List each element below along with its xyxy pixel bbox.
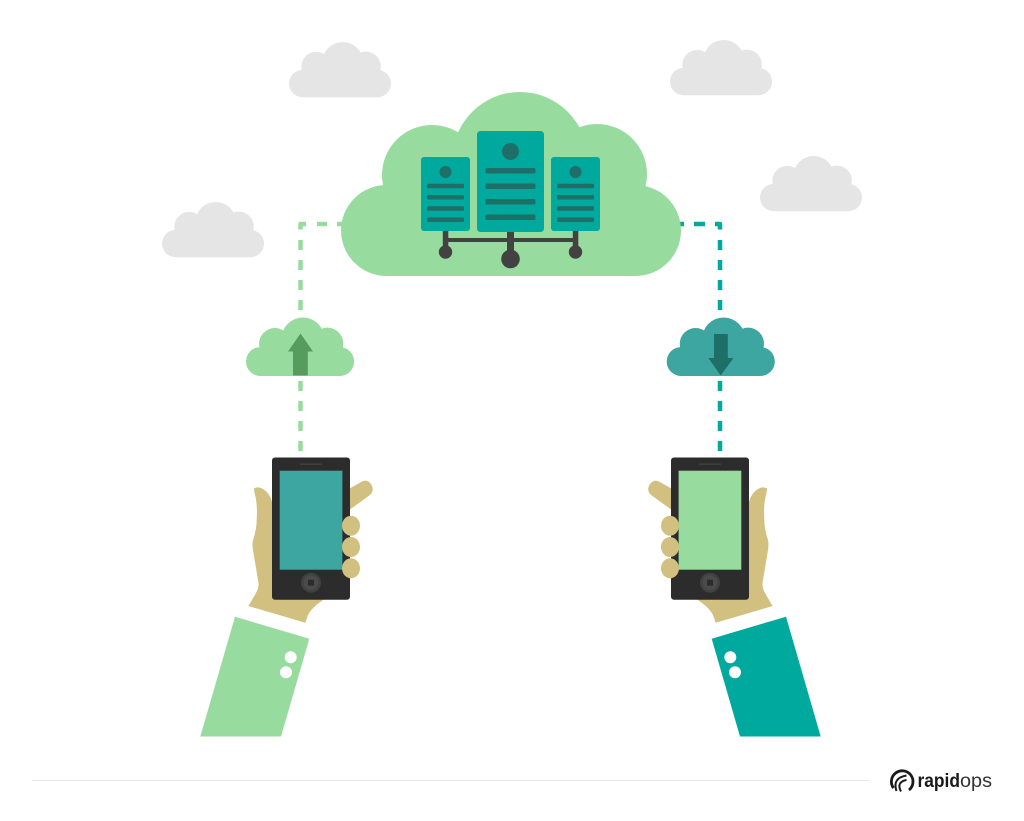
phone <box>272 458 350 600</box>
server network <box>421 131 600 268</box>
server: centre <box>477 131 544 232</box>
sleeve buttons <box>724 651 741 678</box>
background cloud: top left <box>289 42 391 97</box>
icon: logo swirl <box>891 771 913 792</box>
logo wordmark <box>918 771 992 792</box>
server: right <box>551 157 600 231</box>
phone <box>671 458 749 600</box>
upload cloud with arrow <box>246 318 354 376</box>
icon: up arrow <box>288 334 313 376</box>
main cloud <box>341 92 681 276</box>
upload dashed connector <box>300 224 345 451</box>
background cloud: right <box>760 156 862 211</box>
hand <box>648 481 773 623</box>
background cloud: top right <box>670 40 772 95</box>
background cloud: left <box>162 202 264 257</box>
logo wordmark: rapid <box>918 771 960 792</box>
download cloud with arrow <box>667 318 775 376</box>
network connections <box>439 230 582 268</box>
fingers <box>342 516 360 578</box>
icon: down arrow <box>708 334 734 376</box>
fingers <box>661 516 679 578</box>
server: left <box>421 157 470 231</box>
download dashed connector <box>677 224 720 451</box>
logo wordmark: ops <box>960 771 992 792</box>
rapidops logo <box>891 771 992 792</box>
footer rule <box>32 780 870 781</box>
sleeve <box>200 617 309 736</box>
right hand holding phone <box>648 458 821 736</box>
sleeve <box>712 617 821 736</box>
hand <box>248 481 373 623</box>
sleeve buttons <box>280 651 297 678</box>
left hand holding phone <box>200 458 373 736</box>
